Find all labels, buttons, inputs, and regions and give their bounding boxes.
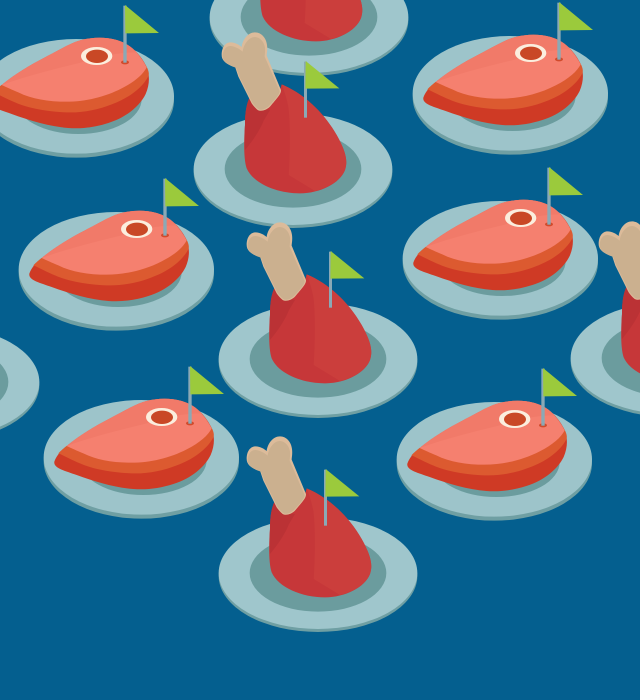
plate [571, 302, 640, 417]
meat leg with bone [599, 221, 640, 382]
steak on plate: middle left [19, 178, 214, 331]
flag: bottom centre leg [324, 469, 359, 526]
steak [423, 35, 583, 125]
meat leg with bone [247, 222, 371, 383]
plate: left edge [0, 326, 39, 441]
leg on plate: right edge [571, 221, 640, 417]
steak on plate: top left [0, 5, 174, 158]
plate [194, 113, 392, 228]
leg on plate: top centre [210, 0, 408, 76]
meat leg with bone [222, 32, 346, 193]
flag [545, 167, 583, 226]
plate [397, 402, 592, 521]
plate [210, 0, 408, 76]
meat leg with bone [247, 436, 371, 597]
flag [555, 2, 593, 61]
steak on plate: middle right [403, 167, 598, 320]
flag [121, 5, 159, 64]
flag [329, 251, 364, 308]
flag [186, 366, 224, 425]
flag [161, 178, 199, 237]
leg on plate: centre [219, 222, 417, 418]
plate [44, 400, 239, 519]
meat leg [238, 0, 362, 41]
steak [0, 38, 149, 128]
flag [539, 368, 577, 427]
plate [219, 517, 417, 632]
steak on plate: lower left [44, 366, 239, 519]
plate [0, 39, 174, 158]
leg on plate: bottom centre [219, 436, 417, 632]
steak on plate: lower right [397, 368, 592, 521]
plate [19, 212, 214, 331]
flag [304, 61, 339, 118]
steak [407, 401, 567, 491]
steak [413, 200, 573, 290]
steak [54, 399, 214, 489]
steak [29, 211, 189, 301]
plate [219, 303, 417, 418]
plate [403, 201, 598, 320]
steak on plate: top right [413, 2, 608, 155]
leg on plate: upper centre [194, 32, 392, 228]
plate [413, 36, 608, 155]
